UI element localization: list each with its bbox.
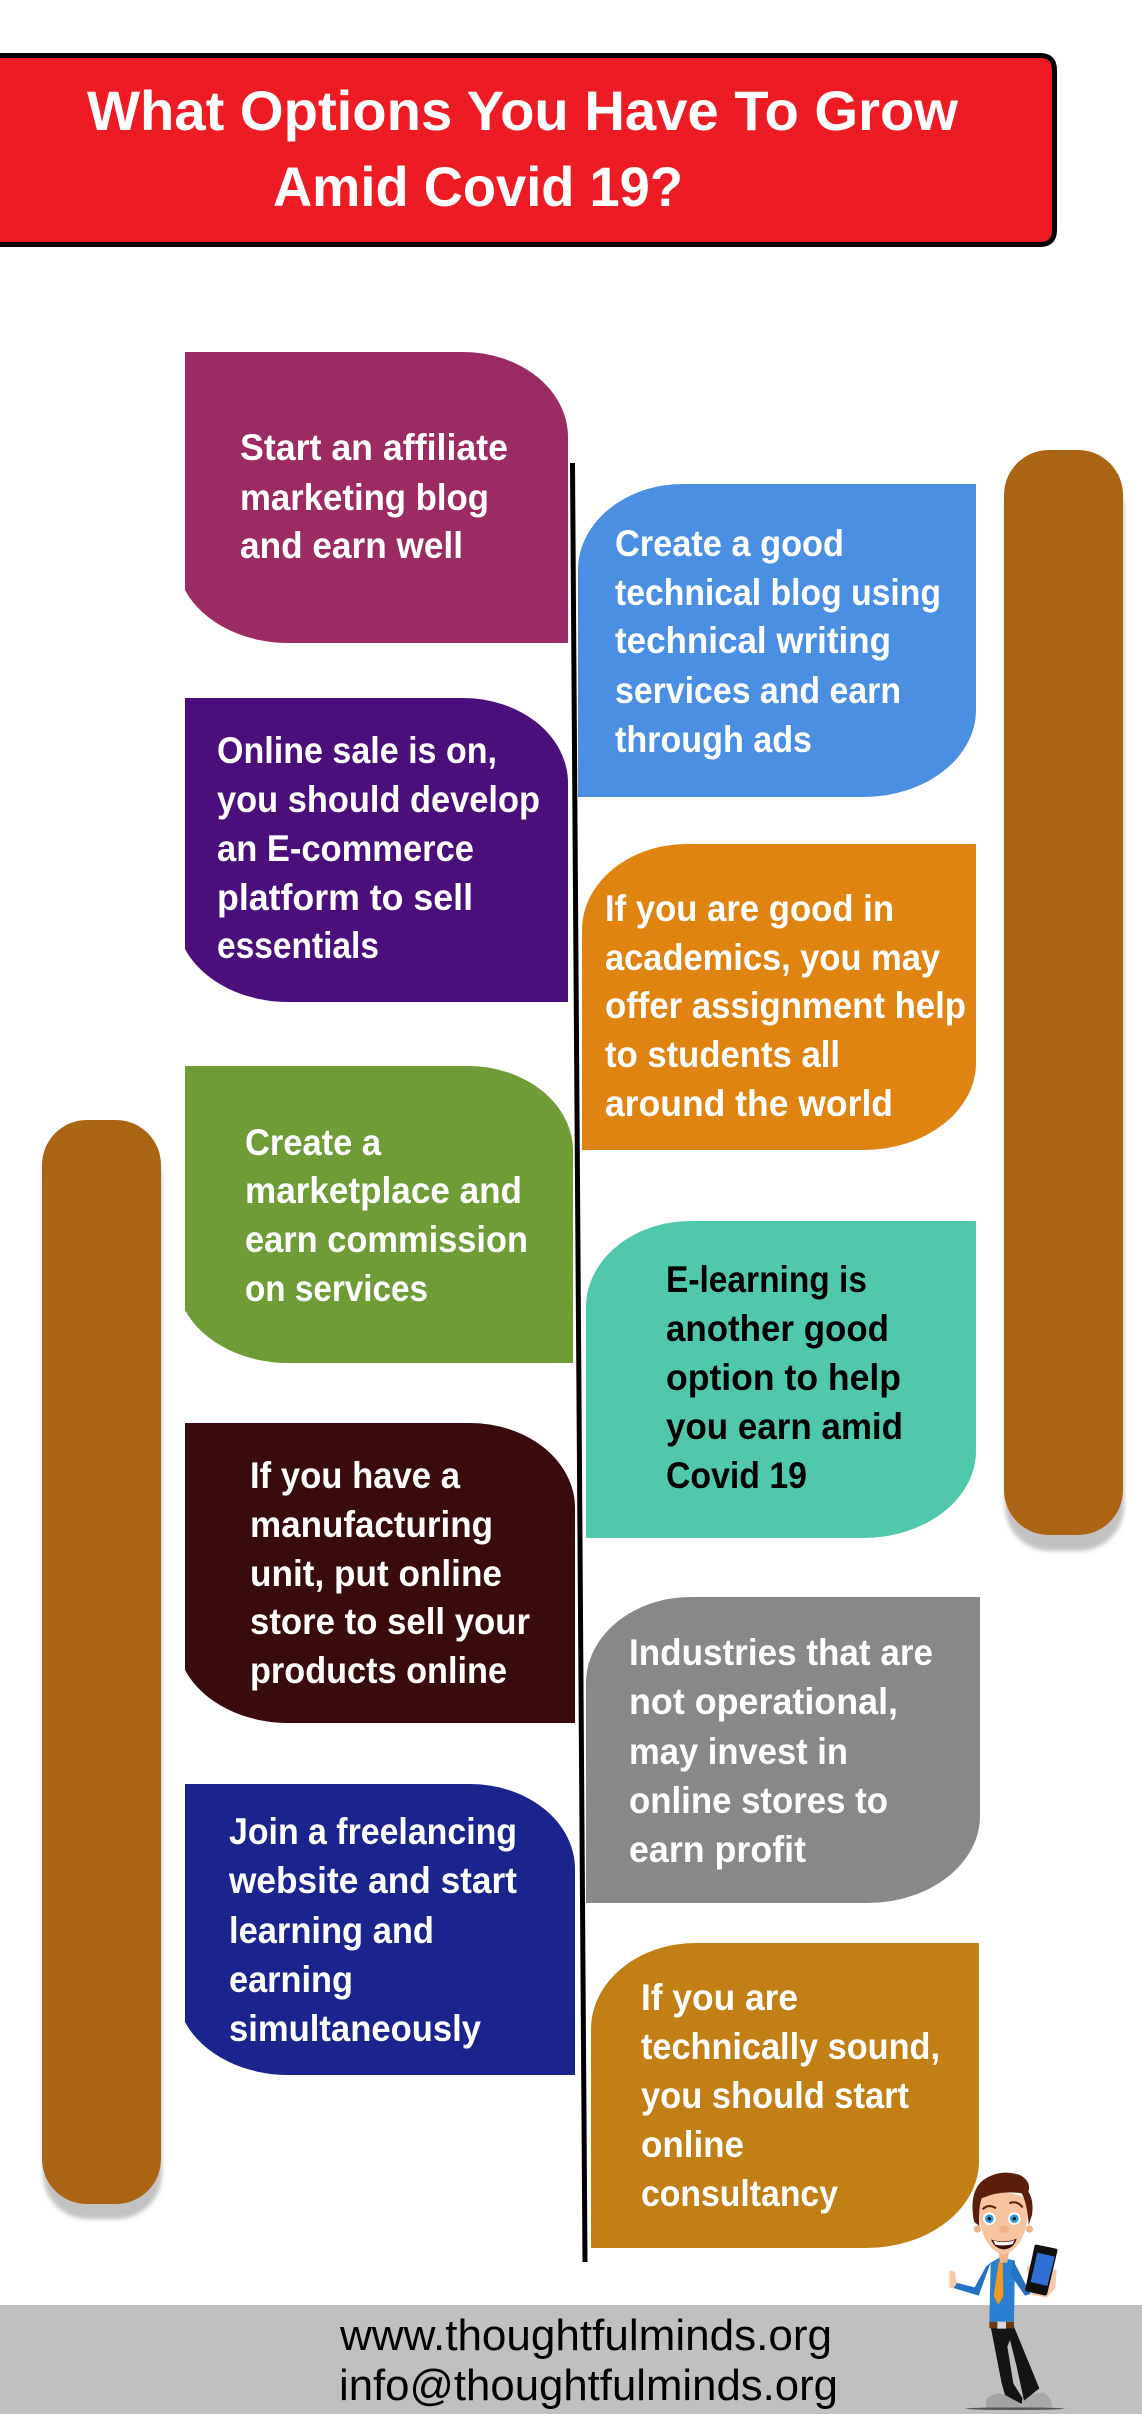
- text: consultancy: [641, 1977, 940, 2214]
- text: consultancy: technically sound,: [641, 2026, 940, 2067]
- text: assignment help: [605, 888, 966, 1124]
- text: e-learning: E-learning is: [666, 1259, 867, 1300]
- central vertical line: [572, 463, 585, 2262]
- title text: Amid Covid 19?: [273, 155, 683, 218]
- right brown pillar: [1004, 450, 1124, 1551]
- text: marketplace: [245, 1122, 528, 1309]
- text: freelancing: earning: [229, 1959, 353, 2000]
- text: manufacturing: products online: [250, 1650, 507, 1691]
- text: consultancy: consultancy: [641, 2173, 838, 2214]
- panel: technical blog: [578, 484, 976, 797]
- text: industries: Industries that are: [629, 1632, 933, 1673]
- text: e-commerce: essentials: [217, 925, 379, 966]
- text: e-commerce: you should develop: [217, 779, 540, 820]
- text: assignment help: around the world: [605, 1083, 893, 1124]
- text: affiliate blog: and earn well: [240, 525, 463, 566]
- title text: [87, 79, 958, 218]
- text: e-commerce: platform to sell: [217, 877, 473, 918]
- footer band: [0, 2305, 1142, 2414]
- title text: What Options You Have To Grow: [87, 79, 958, 142]
- text: manufacturing: manufacturing: [250, 1504, 493, 1545]
- text: freelancing: [228, 1811, 517, 2049]
- panel: e-learning: [586, 1221, 976, 1538]
- text: e-commerce: Online sale is on,: [217, 730, 497, 771]
- text: technical blog: Create a good: [615, 523, 844, 564]
- title banner: [0, 56, 1054, 244]
- text: technical blog: [615, 523, 941, 760]
- text: freelancing: Join a freelancing: [229, 1811, 517, 1852]
- text: assignment help: academics, you may: [605, 937, 940, 978]
- text: technical blog: technical writing: [615, 620, 891, 661]
- text: e-learning: another good: [666, 1308, 889, 1349]
- text: assignment help: offer assignment help: [605, 985, 966, 1026]
- text: e-learning: option to help: [666, 1357, 901, 1398]
- text: e-learning: [666, 1259, 903, 1496]
- text: affiliate blog: Start an affiliate: [240, 427, 508, 468]
- icon: cartoon man holding a phone: [949, 2173, 1064, 2410]
- text: freelancing: simultaneously: [229, 2008, 481, 2049]
- panel: e-commerce platform: [185, 698, 568, 1002]
- panel: marketplace: [185, 1066, 573, 1363]
- text: e-learning: Covid 19: [666, 1455, 807, 1496]
- text: e-commerce: an E-commerce: [217, 828, 474, 869]
- text: affiliate blog: [240, 427, 508, 566]
- footer contact text: [339, 2311, 838, 2410]
- text: industries: may invest in: [629, 1731, 848, 1772]
- text: industries: earn profit: [629, 1829, 806, 1870]
- panel: affiliate marketing blog: [185, 352, 568, 643]
- text: manufacturing: store to sell your: [250, 1601, 530, 1642]
- text: consultancy: online: [641, 2124, 744, 2165]
- text: consultancy: you should start: [641, 2075, 909, 2116]
- text: marketplace: Create a: [245, 1122, 381, 1163]
- panel: freelancing: [185, 1784, 575, 2075]
- footer contact text: www.thoughtfulminds.org: [339, 2311, 832, 2360]
- text: freelancing: learning and: [229, 1910, 434, 1951]
- left brown pillar: [42, 1120, 162, 2219]
- panel: industries online stores: [586, 1597, 980, 1903]
- text: assignment help: If you are good in: [605, 888, 894, 929]
- text: technical blog: technical blog using: [615, 572, 941, 613]
- text: industries: online stores to: [629, 1780, 888, 1821]
- footer contact text: info@thoughtfulminds.org: [339, 2361, 838, 2410]
- panel: assignment help: [582, 844, 976, 1150]
- text: freelancing: website and start: [228, 1860, 517, 1901]
- text: e-commerce: [217, 730, 540, 966]
- panel: online consultancy: [591, 1943, 979, 2248]
- text: marketplace: earn commission: [245, 1219, 528, 1260]
- text: manufacturing: If you have a: [250, 1455, 460, 1496]
- text: industries: not operational,: [629, 1681, 898, 1722]
- text: manufacturing: [250, 1455, 530, 1691]
- text: manufacturing: unit, put online: [250, 1553, 502, 1594]
- text: assignment help: to students all: [605, 1034, 840, 1075]
- text: technical blog: through ads: [615, 719, 812, 760]
- text: affiliate blog: marketing blog: [240, 477, 489, 518]
- text: technical blog: services and earn: [615, 670, 901, 711]
- text: marketplace: marketplace and: [245, 1170, 522, 1211]
- text: consultancy: If you are: [641, 1977, 798, 2018]
- text: marketplace: on services: [245, 1268, 428, 1309]
- text: industries: [629, 1632, 933, 1870]
- text: e-learning: you earn amid: [666, 1406, 903, 1447]
- panel: manufacturing unit: [185, 1423, 575, 1723]
